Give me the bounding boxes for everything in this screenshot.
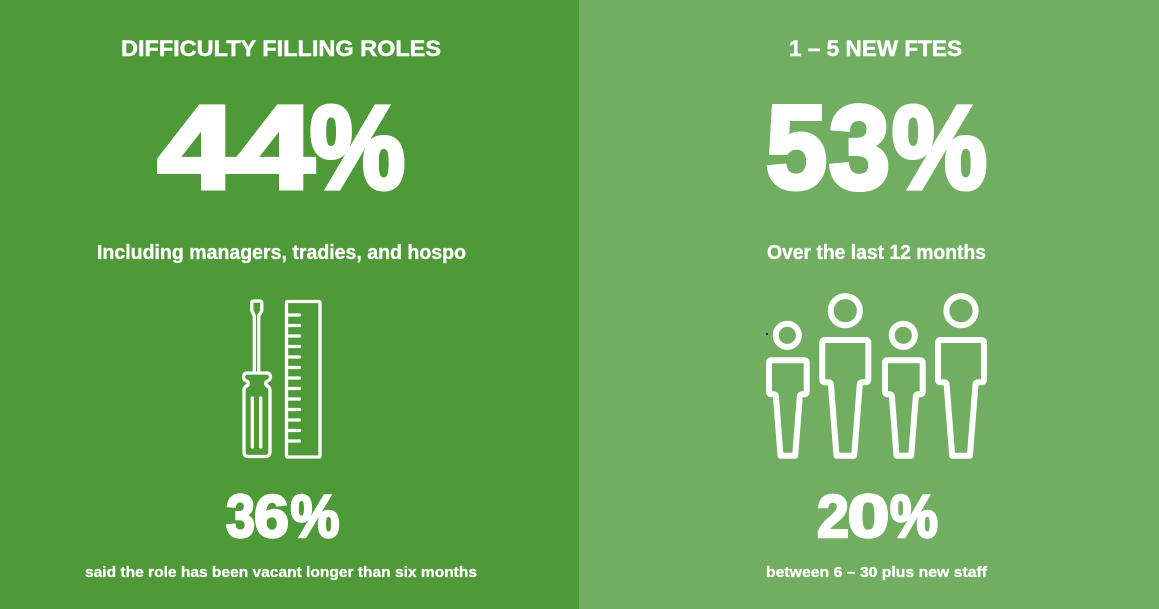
big stat: 53%: 5 <box>766 82 827 214</box>
icon: ruler <box>286 302 320 457</box>
big stat: 53%: 3 <box>829 82 890 214</box>
icon: small person two <box>885 324 923 456</box>
stat: 36%: 3 <box>226 483 255 550</box>
panel: 1-5 new FTEs <box>579 0 1159 609</box>
stat: 36%: 6 <box>254 483 289 550</box>
stat: 20%: 2 <box>817 483 849 550</box>
stat: 20%: % <box>890 483 938 550</box>
caption: vacant longer than six months: said the role has been vacant longer than six months <box>85 564 477 581</box>
stat: 36%: % <box>290 483 340 550</box>
panel: difficulty filling roles <box>0 0 579 609</box>
subheading: over the last 12 months: Over the last 12 months <box>767 242 986 264</box>
subheading: including managers: Including managers, tradies, and hospo <box>97 242 466 264</box>
icon: tall person one <box>822 296 868 456</box>
big stat: 44%: 4 <box>158 82 236 214</box>
icon: small person one <box>769 324 807 456</box>
icon: screwdriver <box>244 301 270 456</box>
icon: group of four people <box>769 296 984 456</box>
icon: tall person two <box>938 296 984 456</box>
big stat: 44%: 4 <box>236 82 314 214</box>
caption: between 6-30 plus new staff: between 6 – 30 plus new staff <box>766 564 988 581</box>
big stat: 53%: % <box>892 82 987 214</box>
icon: screwdriver and ruler <box>244 301 320 457</box>
big stat: 44%: % <box>310 82 405 214</box>
stat: 20%: 0 <box>848 483 890 550</box>
heading: difficulty filling roles: DIFFICULTY FILLING ROLES <box>121 36 441 61</box>
heading: 1-5 new FTEs: 1 – 5 NEW FTES <box>789 36 962 61</box>
